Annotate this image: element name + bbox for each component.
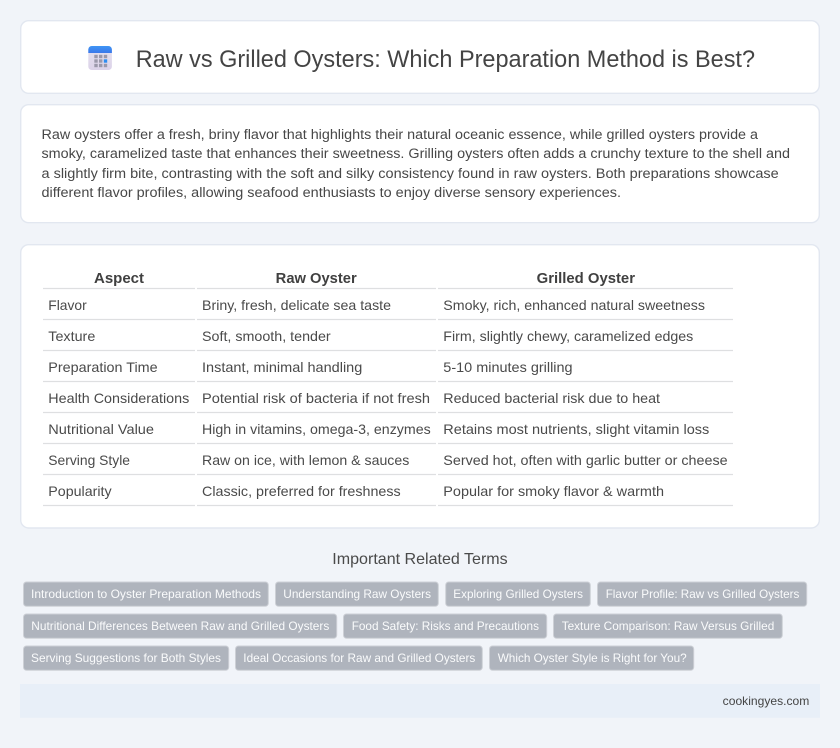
table header — [94, 271, 635, 287]
tag: serving suggestions: Serving Suggestions for Both Styles — [31, 651, 221, 665]
row: preparation time — [48, 359, 573, 375]
row: nutritional value: Retains most nutrients, slight vitamin loss — [443, 421, 709, 437]
row: popularity: Classic, preferred for freshness — [202, 483, 401, 499]
row: health considerations: Reduced bacterial risk due to heat — [443, 390, 660, 406]
row: serving style: Serving Style — [48, 452, 130, 468]
tag: nutritional differences: Nutritional Differences Between Raw and Grilled Oysters — [31, 619, 329, 633]
icon: calendar — [88, 46, 112, 70]
row: popularity: Popular for smoky flavor & warmth — [443, 483, 664, 499]
related term tags — [24, 582, 807, 670]
table header: Raw Oyster — [276, 271, 357, 287]
tag: food safety — [344, 614, 547, 638]
row: nutritional value — [48, 421, 709, 437]
row: popularity: Popularity — [48, 483, 112, 499]
row: preparation time: 5-10 minutes grilling — [443, 359, 573, 375]
tag: ideal occasions: Ideal Occasions for Raw and Grilled Oysters — [243, 651, 475, 665]
row: serving style: Served hot, often with garlic butter or cheese — [443, 452, 728, 468]
row: texture — [48, 328, 693, 344]
row: texture: Texture — [48, 328, 96, 344]
row: serving style: Raw on ice, with lemon & sauces — [202, 452, 409, 468]
intro paragraph: different flavor profiles, allowing seafood enthusiasts to enjoy diverse sensory experiences. — [42, 185, 621, 201]
heading: related terms: Important Related Terms — [332, 551, 508, 568]
row: flavor — [48, 297, 705, 313]
tag: exploring grilled — [446, 582, 590, 606]
footer source: cookingyes.com — [723, 694, 809, 708]
panel: header — [21, 21, 819, 93]
tag: texture comparison — [554, 614, 782, 638]
tag: understanding raw: Understanding Raw Oysters — [283, 587, 431, 601]
intro paragraph — [42, 127, 790, 201]
footer — [20, 684, 820, 718]
table header: Aspect — [94, 271, 144, 287]
tag: understanding raw — [276, 582, 438, 606]
title: Raw vs Grilled Oysters: Which Preparation Method is Best? — [136, 46, 755, 73]
tag: flavor profile — [598, 582, 807, 606]
tag: which style: Which Oyster Style is Right for You? — [498, 651, 687, 665]
panel: comparison table — [21, 245, 819, 528]
tag: texture comparison: Texture Comparison: Raw Versus Grilled — [562, 619, 774, 633]
tag: exploring grilled: Exploring Grilled Oysters — [453, 587, 583, 601]
row: preparation time: Instant, minimal handling — [202, 359, 362, 375]
intro paragraph: a slightly firm bite, contrasting with the soft and silky consistency found in raw oysters. Both preparations showcase — [42, 166, 779, 182]
row: flavor: Smoky, rich, enhanced natural sweetness — [443, 297, 705, 313]
row: health considerations: Potential risk of bacteria if not fresh — [202, 390, 430, 406]
row: nutritional value: High in vitamins, omega-3, enzymes — [202, 421, 431, 437]
tag: serving suggestions — [24, 646, 229, 670]
panel: introduction — [21, 105, 819, 223]
row: health considerations: Health Considerations — [48, 390, 189, 406]
row: preparation time: Preparation Time — [48, 359, 158, 375]
intro paragraph: smoky, caramelized taste that enhances their sweetness. Grilling oysters often adds a crunchy texture to the shell and — [42, 146, 790, 162]
tag: food safety: Food Safety: Risks and Precautions — [352, 619, 539, 633]
tag: introduction: Introduction to Oyster Preparation Methods — [31, 587, 261, 601]
row: texture: Soft, smooth, tender — [202, 328, 331, 344]
row: health considerations — [48, 390, 660, 406]
row: nutritional value: Nutritional Value — [48, 421, 154, 437]
intro paragraph: Raw oysters offer a fresh, briny flavor that highlights their natural oceanic essence, while grilled oysters provide a — [42, 127, 758, 143]
row: flavor: Flavor — [48, 297, 87, 313]
tag: nutritional differences — [24, 614, 337, 638]
tag: ideal occasions — [236, 646, 482, 670]
tag: flavor profile: Flavor Profile: Raw vs Grilled Oysters — [606, 587, 799, 601]
tag: which style — [490, 646, 694, 670]
row: popularity — [48, 483, 664, 499]
row: texture: Firm, slightly chewy, caramelized edges — [443, 328, 693, 344]
tag: introduction — [24, 582, 268, 606]
table header: Grilled Oyster — [537, 271, 635, 287]
row: serving style — [48, 452, 728, 468]
row: flavor: Briny, fresh, delicate sea taste — [202, 297, 391, 313]
